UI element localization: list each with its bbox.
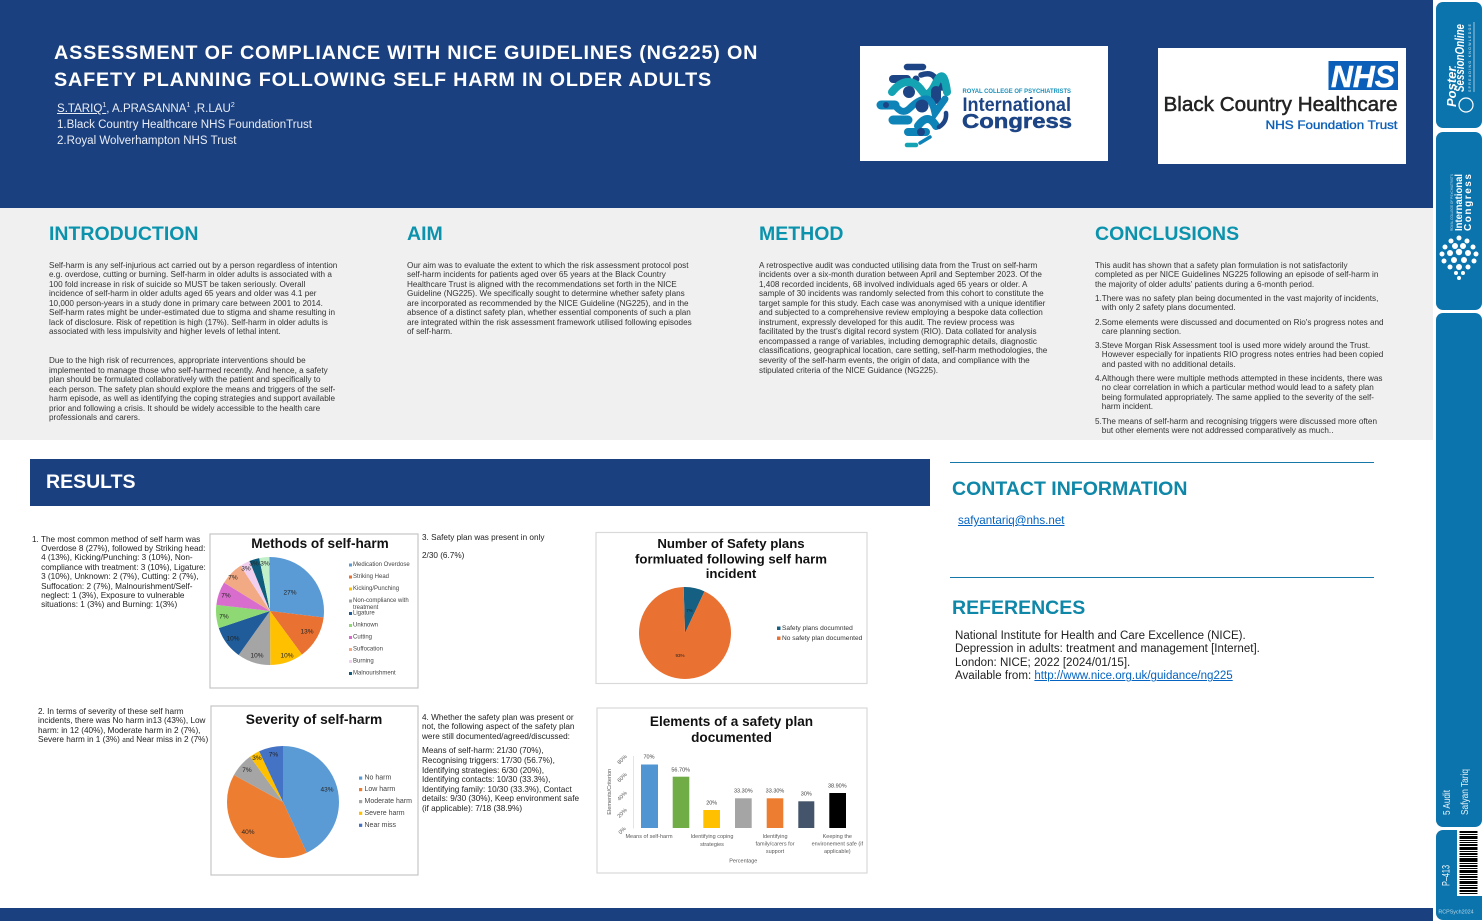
poster number and barcode: RCPSych2024 <box>1438 910 1474 916</box>
legend: Moderate harm <box>364 798 412 805</box>
chart title: Severity of self-harm <box>246 712 382 727</box>
legend: No harm <box>364 774 392 782</box>
heading: method: METHOD <box>759 223 844 245</box>
panel: summary band <box>0 208 1433 440</box>
pie value labels: 7% <box>219 614 229 620</box>
y axis: 20% <box>617 807 629 820</box>
chart title <box>635 536 827 581</box>
bar value labels: 38.90% <box>828 783 847 789</box>
logo text: International <box>962 95 1071 116</box>
category labels: applicable) <box>824 849 851 855</box>
bar value labels: 56.70% <box>671 767 690 773</box>
legend <box>349 562 410 676</box>
tab logo text: SessionOnline <box>1452 24 1467 92</box>
trust name: NHS Foundation Trust <box>1266 118 1398 132</box>
category and author: Safyan Tariq <box>1460 769 1471 815</box>
legend: Unknown <box>353 622 378 628</box>
chart: methods of self-harm pie <box>209 533 419 689</box>
bar value labels: 33.30% <box>766 789 784 795</box>
pie slices <box>243 584 297 638</box>
NHS lozenge: NHS <box>1331 59 1395 94</box>
pie value labels: 3% <box>241 566 251 572</box>
conclusion 3: 3.Steve Morgan Risk Assessment tool is used more widely around the Trust. However especially for inpatients RIO progress notes entries had been copied and pasted with no additional details. <box>1095 340 1383 369</box>
authors and affiliations <box>57 102 312 147</box>
conclusion 1: 1.There was no safety plan being documented in the vast majority of incidents, with only 2 safety plans documented. <box>1095 294 1378 312</box>
pie value labels: 3% <box>252 755 262 762</box>
conclusion 4: 4.Although there were multiple methods attempted in these incidents, there was no clear correlation in which a particular method would lead to a safety plan being formulated appropriately. The same applied to the severity of the self- harm incident. <box>1095 374 1382 411</box>
pie value labels: 7% <box>269 752 278 758</box>
poster number and barcode <box>1438 830 1482 916</box>
category labels: Keeping the <box>823 834 852 840</box>
conclusion 2: 2.Some elements were discussed and documented on Rio's progress notes and care planning section. <box>1095 318 1384 336</box>
pie value labels: 10% <box>280 652 294 660</box>
logo text: Congress <box>962 111 1072 133</box>
bar value labels: 33.30% <box>734 789 753 795</box>
panel: contact information <box>950 462 1374 578</box>
chart title: Methods of self-harm <box>251 536 389 551</box>
heading: aim: AIM <box>407 223 443 245</box>
category and author: 5 Audit <box>1442 790 1453 815</box>
results heading bar <box>30 459 930 506</box>
heading: introduction: INTRODUCTION <box>49 223 198 245</box>
category and author <box>1442 769 1471 815</box>
legend <box>777 625 863 642</box>
chart title: Elements of a safety plan <box>650 714 813 729</box>
legend: Medication Overdose <box>353 562 410 568</box>
bar value labels <box>643 755 847 807</box>
chart: safety plans pie <box>596 532 868 684</box>
legend: Suffocation <box>353 646 383 652</box>
category labels: Identifying coping <box>691 834 733 840</box>
conclusion 5: 5.The means of self-harm and recognising triggers were discussed more often but other elements were not addressed comparatively as much.. <box>1095 416 1377 435</box>
chart: severity of self-harm pie <box>210 705 419 876</box>
text: result 3: 3. Safety plan was present in only 2/30 (6.7%) <box>422 532 544 560</box>
authors and affiliations: 2.Royal Wolverhampton NHS Trust <box>57 135 236 147</box>
tab logo <box>1440 174 1478 280</box>
bar value labels: 70% <box>643 755 655 761</box>
tab logo text <box>1444 22 1474 113</box>
legend <box>359 774 412 829</box>
logo: NHS Black Country Healthcare <box>1158 48 1406 164</box>
text: result 4: 4. Whether the safety plan was present or not, the following aspect of the safety plan were still documented/agreed/discussed: <box>422 712 574 741</box>
text: aim: Our aim was to evaluate the extent to which the risk assessment protocol post self-harm incidents for patients aged over 65 years at the Black Country Healthcare Trust is aligned with the recommendations set forth in the NICE Guideline (NG225). We specifically sought to determine whether safety plans are incorporated as recommended by the NICE Guideline (NG225), and in the absence of a distinct safety plan, whether essential components of such a plan are integrated within the risk assessment framework utilised following episodes of self-harm. <box>407 260 692 336</box>
pie value labels <box>241 752 334 836</box>
reference text: National Institute for Health and Care Excellence (NICE). <box>955 630 1246 642</box>
heading: results: RESULTS <box>46 471 136 493</box>
pie value labels: 40% <box>241 829 255 836</box>
heading: contact information: CONTACT INFORMATION <box>952 478 1187 500</box>
pie value labels: 43% <box>320 786 334 794</box>
bar value labels: 30% <box>801 792 812 798</box>
legend: Malnourishment <box>353 670 396 676</box>
text: conclusions intro: This audit has shown that a safety plan formulation is not satisfactorily completed as per NICE Guidelines NG225 following an episode of self-harm in the majority of older adults' patients during a 6-month period. <box>1095 260 1378 289</box>
pie slices <box>662 610 708 656</box>
category labels: support <box>766 849 785 855</box>
legend: Burning <box>353 658 374 664</box>
category labels: Identifying <box>762 834 788 840</box>
legend: No safety plan documented <box>782 635 863 642</box>
text: introduction: Self-harm is any self-injurious act carried out by a person regardless of intention e.g. overdose, cutting or burning. Self-harm in older adults is associated with a 100 fold increase in risk of suicide so MUST be taken seriously. Overall incidence of self-harm in older adults aged 65 years and older was 4.1 per 10,000 person-years in a study done in primary care between 2001 to 2014. Self-harm rates might be under-estimated due to stigma and shame resulting in lack of disclosure. Risk of repetition is high (17%). Self-harm in older adults is associated with less impulsivity and higher levels of lethal intent. Due to the high risk of recurrences, appropriate interventions should be implemented to manage those who self-harmed recently. And hence, a safety plan should be formulated collaboratively with the patient and specifically to each person. The safety plan should explore the means and triggers of the self- harm episode, as well as identifying the coping strategies and support available prior and following a crisis. It should be widely accessible to the health care professionals and carers. <box>49 260 337 422</box>
text: method: A retrospective audit was conducted utilising data from the Trust on self-harm incidents over a six-month duration between April and September 2023. Of the 1,408 recorded incidents, 68 involved individuals aged 65 years or older. A sample of 30 incidents was randomly selected from this cohort to constitute the target sample for this study. Each case was anonymised with a unique identifier and subjected to a comprehensive review employing a bespoke data collection instrument, expressly developed for this audit. The review process was facilitated by the trust's digital record system (RIO). Data collated for analysis encompassed a range of variables, including demographic details, diagnostic classifications, geographical location, care setting, self-harm methodologies, the severity of the self-harm events, the origin of data, and compliance with the stipulated criteria of the NICE Guidance (NG225). <box>759 260 1047 375</box>
title: SAFETY PLANNING FOLLOWING SELF HARM IN OLDER ADULTS <box>54 69 712 91</box>
pie value labels: 7% <box>228 574 238 582</box>
tab logo text: Poster <box>1444 66 1459 107</box>
chart title: documented <box>691 730 772 745</box>
legend: treatment <box>353 605 379 611</box>
logo text: ROYAL COLLEGE OF PSYCHIATRISTS <box>962 88 1072 95</box>
chart: elements of a safety plan bars <box>596 708 868 874</box>
legend: Severe harm <box>364 810 405 817</box>
heading: references: REFERENCES <box>952 597 1085 619</box>
chart title: formluated following self harm <box>635 552 827 566</box>
panel: references <box>952 597 1260 682</box>
category labels: strategies <box>700 842 724 848</box>
y axis: 40% <box>617 790 629 803</box>
legend: Striking Head <box>353 574 389 580</box>
pie value labels <box>219 560 314 660</box>
reference text: Available from: http://www.nice.org.uk/guidance/ng225 <box>955 670 1233 682</box>
contact email: safyantariq@nhs.net <box>958 514 1065 527</box>
tab logo text: SPREADING KNOWLEDGE <box>1468 23 1472 92</box>
y axis: Elements/Criterion <box>607 769 613 815</box>
category labels: Percentage <box>729 858 757 864</box>
chart title: incident <box>706 566 757 581</box>
pie value labels: 7% <box>686 608 693 613</box>
pie value labels: 27% <box>283 590 297 596</box>
legend: Low harm <box>364 786 395 793</box>
footer bar <box>0 908 1433 921</box>
legend: Ligature <box>353 610 375 616</box>
y axis: 0% <box>618 826 628 836</box>
sidebar tab: International Congress <box>1436 132 1482 310</box>
tab logo: International <box>1454 174 1465 231</box>
chart title: Number of Safety plans <box>657 536 805 551</box>
logo text <box>962 88 1072 133</box>
pie value labels: 3% <box>249 560 259 568</box>
title <box>54 42 758 91</box>
reference text: Depression in adults: treatment and management [Internet]. <box>955 643 1260 655</box>
pie value labels <box>675 608 693 658</box>
pie slices <box>255 774 311 830</box>
text: result 4: Means of self-harm: 21/30 (70%), Recognising triggers: 17/30 (56.7%), Identifying strategies: 6/30 (20%), Identifying contacts: 10/30 (33.3%), Identifying family: 10/30 (33.3%), Contact details: 9/30 (30%), Keep environment safe (if applicable): 7/18 (38.9%) <box>422 746 579 813</box>
pie value labels: 3% <box>260 560 270 568</box>
legend: Safety plans documnted <box>782 625 853 632</box>
organisation name: Black Country Healthcare <box>1164 94 1398 116</box>
authors and affiliations: 1.Black Country Healthcare NHS FoundationTrust <box>57 119 312 131</box>
y axis <box>607 754 634 836</box>
pie value labels: 7% <box>242 767 252 774</box>
text: result 1: 1. The most common method of self harm was Overdose 8 (27%), followed by Striking head: 4 (13%), Kicking/Punching: 3 (10%), Non- compliance with treatment: 3 (10%), Ligature: 3 (10%), Unknown: 2 (7%), Cutting: 2 (7%), Suffocation: 2 (7%), Malnourishment/Self- neglect: 1 (3%), Exposure to vulnerable situations: 1 (3%) and Burning: 1(3%) <box>32 534 206 609</box>
text: result 4 <box>422 712 579 813</box>
poster number and barcode: P–413 <box>1440 865 1452 886</box>
header band <box>0 0 1433 208</box>
reference text: London: NICE; 2022 [2024/01/15]. <box>955 657 1130 669</box>
category labels: Means of self-harm <box>625 834 673 840</box>
pie value labels: 10% <box>250 652 264 660</box>
bar value labels: 20% <box>706 801 717 807</box>
y axis: 60% <box>617 772 629 784</box>
category labels <box>625 834 863 864</box>
y axis: 80% <box>617 754 629 766</box>
tab logo: ROYAL COLLEGE OF PSYCHIATRISTS <box>1450 174 1454 231</box>
heading: conclusions: CONCLUSIONS <box>1095 223 1239 245</box>
legend: Cutting <box>353 634 372 640</box>
category labels: family/carers for <box>755 842 795 848</box>
chart title <box>650 714 813 745</box>
pie value labels: 7% <box>221 592 231 600</box>
sidebar tab: abstract details <box>1436 313 1482 827</box>
title: ASSESSMENT OF COMPLIANCE WITH NICE GUIDELINES (NG225) ON <box>54 42 758 64</box>
sidebar tab: Poster Session Online <box>1436 2 1482 128</box>
reference text <box>955 630 1260 682</box>
legend: Kicking/Punching <box>353 586 399 592</box>
legend: Non-compliance with <box>353 598 409 604</box>
pie value labels: 10% <box>226 636 240 642</box>
text: result 2: 2. In terms of severity of these self harm incidents, there was No harm in13 (43%), Low harm: in 12 (40%), Moderate harm in 2 (7%), Severe harm in 1 (3%) and Near miss in 2 (7%) <box>38 707 208 744</box>
tab logo: Congress <box>1463 174 1474 231</box>
pie value labels: 93% <box>675 653 685 658</box>
pie value labels: 13% <box>300 628 314 636</box>
legend: Near miss <box>364 822 397 829</box>
icon: dotted globe <box>881 67 947 145</box>
logo: Royal College of Psychiatrists International Congress <box>860 46 1108 161</box>
category labels: environement safe (if <box>812 842 863 848</box>
authors and affiliations: S.TARIQ1, A.PRASANNA1 ,R.LAU2 <box>57 102 235 115</box>
sidebar tab: poster number and barcode <box>1436 830 1482 920</box>
bars <box>641 764 846 828</box>
